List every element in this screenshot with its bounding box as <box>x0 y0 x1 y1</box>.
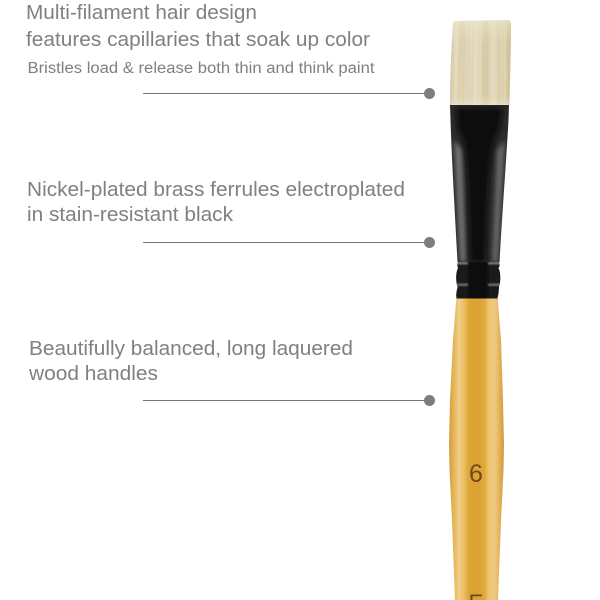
callout: ferrule <box>27 179 435 248</box>
paintbrush illustration <box>449 20 511 600</box>
brush bristles <box>450 20 511 106</box>
handle size number: 6 <box>469 460 483 488</box>
brush ferrule <box>450 105 509 300</box>
leader line: handle <box>143 395 435 406</box>
text: bristles load and release: Bristles load & release both thin and think paint <box>28 60 375 77</box>
text: balanced handles: Beautifully balanced, long laquered <box>29 338 353 360</box>
heading: capillaries: features capillaries that soak up color <box>26 29 370 51</box>
leader line: bristles <box>143 88 435 99</box>
heading: multi-filament hair design: Multi-filament hair design <box>26 2 257 24</box>
callout: bristles <box>26 2 435 99</box>
text: nickel-plated ferrules: Nickel-plated brass ferrules electroplated <box>27 179 405 201</box>
leader line: ferrule <box>143 237 435 248</box>
callout: handle <box>28 338 435 406</box>
brush handle <box>449 296 504 600</box>
text: stain-resistant black: in stain-resistant black <box>27 204 234 226</box>
text: wood handles: wood handles <box>28 363 158 385</box>
